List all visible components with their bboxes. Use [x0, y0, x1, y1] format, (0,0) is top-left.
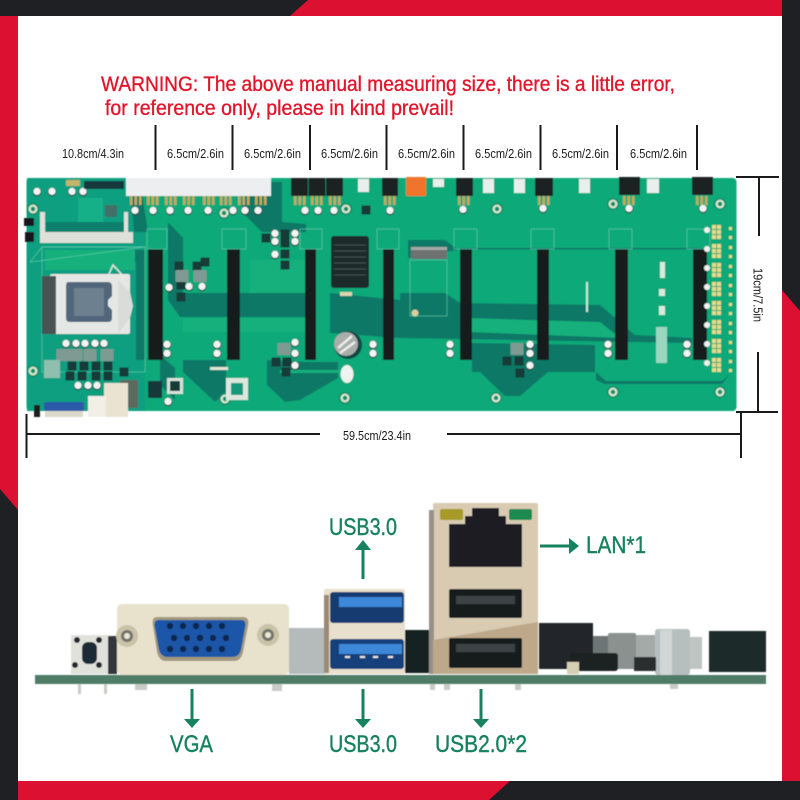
ATX power connector: [126, 178, 271, 196]
label: USB3.0 top: USB3.0: [329, 514, 397, 541]
rear I/O on board: [34, 380, 138, 417]
darker copper traces: [120, 180, 730, 402]
expansion slots: [148, 249, 707, 360]
warning text: [101, 73, 675, 120]
USB 2.0 lower port: [449, 638, 522, 668]
dimension row: section widths: 6.5cm/2.6in: [475, 146, 532, 161]
small capacitors: [33, 188, 707, 406]
label: VGA: [170, 689, 213, 758]
label: USB3.0 bottom: USB3.0: [329, 731, 397, 758]
PCIe edge pads: [704, 225, 732, 372]
heatsink: [331, 236, 369, 288]
CPU socket: [42, 265, 133, 334]
label: LAN*1: [540, 532, 646, 559]
warning text: WARNING: The above manual measuring size, there is a little error,: [101, 73, 675, 96]
left edge switches: [24, 218, 34, 242]
PCB edge: [35, 675, 766, 684]
dimension row: section widths: 6.5cm/2.6in: [552, 146, 609, 161]
through-hole pins: [78, 684, 678, 694]
CR2032 battery: [334, 331, 362, 359]
orange header: [406, 177, 426, 196]
dimension row: section widths: 6.5cm/2.6in: [167, 146, 224, 161]
left teal section: [27, 178, 145, 411]
mounting holes: [27, 198, 726, 405]
header pins: [130, 196, 708, 205]
dimension row: section widths: 6.5cm/2.6in: [398, 146, 455, 161]
lighter traces: [45, 250, 620, 373]
dimension row: section widths: [62, 125, 697, 170]
label: USB2.0*2: USB2.0*2: [435, 731, 527, 758]
label: LAN*1: LAN*1: [586, 532, 646, 559]
black fan headers: [291, 177, 713, 196]
warning text: for reference only, please in kind prevail!: [105, 97, 454, 120]
small chips and inductors: [56, 206, 524, 392]
tactile button: [71, 635, 117, 674]
dimension row: section widths: 6.5cm/2.6in: [244, 146, 301, 161]
white small headers: [358, 179, 659, 193]
rear I/O side view: [35, 503, 766, 694]
status LEDs: [440, 509, 532, 520]
motherboard top view: [24, 177, 736, 417]
white capacitor: [340, 365, 354, 383]
USB 2.0 upper port: [449, 589, 522, 618]
RJ45 and USB 2.0 stack: [429, 503, 538, 674]
M.2 connector: [411, 247, 447, 316]
silkscreen markings: [586, 262, 667, 363]
SO-DIMM slot and module area: [40, 180, 133, 243]
background components: [289, 623, 766, 675]
VGA connector: [116, 604, 289, 675]
height dimension: 19cm/7.5in: 19cm/7.5in: [750, 268, 766, 322]
label: USB2.0*2: [435, 689, 527, 758]
slot keepout outlines: [30, 229, 710, 372]
label: USB3.0 bottom: [329, 689, 397, 758]
dimension row: section widths: 6.5cm/2.6in: [321, 146, 378, 161]
board base: [26, 178, 736, 411]
label: USB3.0 top: [329, 514, 397, 579]
SATA and logic chips: [44, 292, 352, 400]
dimension row: section widths: 10.8cm/4.3in: [62, 146, 124, 161]
width dimension: 59.5cm/23.4in: 59.5cm/23.4in: [343, 428, 411, 443]
label: VGA: VGA: [170, 731, 213, 758]
stacked USB 3.0 ports: [324, 589, 405, 674]
port labels and arrows: [170, 514, 646, 758]
dimension row: section widths: 6.5cm/2.6in: [630, 146, 687, 161]
LAN jack: [449, 508, 522, 567]
